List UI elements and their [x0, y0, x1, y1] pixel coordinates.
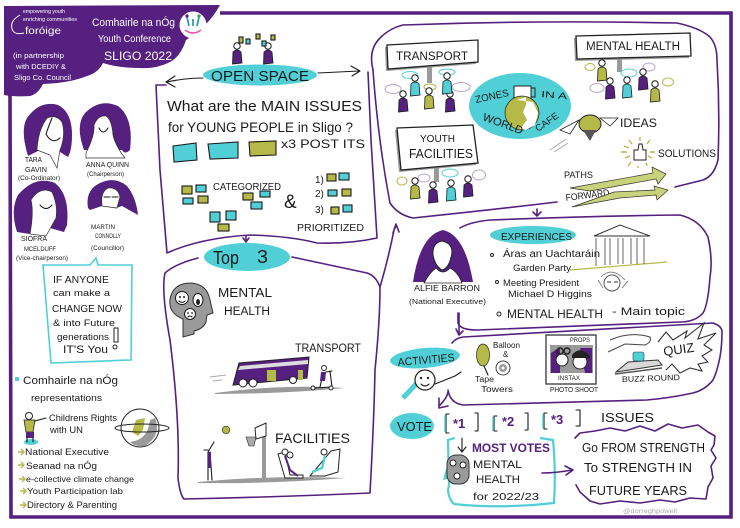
foróige logo: foróige: [25, 26, 62, 37]
post-it notes: [173, 141, 276, 162]
icon: pointing face: [403, 370, 461, 398]
vote pill: VOTE: [397, 419, 432, 434]
panel: alfie barron experiences: Michael D Higgins: [508, 289, 592, 300]
icon: buzzer and hand: [608, 335, 662, 374]
categorized post-its: [182, 185, 270, 231]
sign: youth facilities: FACILITIES: [409, 146, 473, 161]
panel: open space question: PRIORITIZED: [297, 222, 364, 234]
portrait: Martin Connolly: MARTIN: [91, 224, 115, 231]
panel: activities: Towers: [481, 384, 513, 394]
list: comhairle na nóg: representations: [31, 393, 102, 404]
header banner: [4, 5, 220, 96]
partnership note: with DCEDIY &: [15, 64, 66, 71]
panel: world cafe: PATHS: [564, 170, 593, 181]
foróige logo: [12, 9, 77, 37]
portrait: Tara Gavin: TARA: [25, 157, 42, 164]
panel: alfie barron experiences: Áras an Uachtaráin: [503, 247, 600, 260]
icon: aras building: [570, 225, 667, 270]
activities pill: ACTIVITIES: [397, 352, 455, 369]
panel: open space question: 2): [315, 189, 324, 200]
list: comhairle na nóg: e-collective climate change: [26, 474, 134, 484]
top 3 pill: 3: [257, 247, 268, 267]
arrows: paths forward: [570, 167, 668, 207]
list: comhairle na nóg: Comhairle na nÓg: [23, 374, 118, 387]
conference title: Comhairle na nÓg: [92, 16, 175, 29]
ranked issue brackets: ISSUES: [601, 410, 654, 425]
icon: bus and scooter: [210, 357, 345, 394]
foróige logo: empowering youth: [23, 9, 65, 15]
list: comhairle na nóg: Youth Participation lab: [27, 486, 123, 496]
experiences pill: [490, 226, 576, 244]
group: mental health zone people: [585, 60, 674, 102]
panel: alfie barron experiences: ALFIE BARRON: [414, 284, 480, 293]
portrait: Siofra McElduff: [14, 181, 68, 262]
portrait: Anna Quinn: [80, 103, 131, 178]
partnership note: (in partnership: [13, 51, 64, 60]
portrait: Anna Quinn: ANNA QUINN: [86, 162, 129, 169]
icon: people with post-its: [232, 34, 275, 64]
panel: top 3: FACILITIES: [275, 430, 350, 446]
sign: mental health: [574, 33, 691, 72]
portrait: Siofra McElduff: SIOFRA: [21, 236, 47, 243]
artist credit: @dorreghpowell: [623, 508, 678, 515]
world cafe globe badge: [469, 73, 571, 139]
panel: open space question: 1): [315, 175, 324, 186]
callout: if anyone can make a change: IF ANYONE: [53, 274, 109, 286]
panel: alfie barron experiences: - Main topic: [612, 306, 686, 318]
portrait: Siofra McElduff: MCELDUFF: [24, 246, 56, 253]
sign: mental health: MENTAL HEALTH: [586, 41, 680, 53]
panel: activities: &: [503, 350, 509, 359]
arrow: up to world cafe: [380, 224, 399, 287]
open space pill: [203, 64, 317, 86]
icon: flying lightbulb: [550, 115, 618, 152]
portrait: Martin Connolly: (Councillor): [91, 246, 124, 252]
conference title: [92, 16, 175, 63]
panel: alfie barron experiences: [409, 215, 711, 330]
panel: most votes: HEALTH: [476, 474, 520, 486]
ranked issue brackets: *3: [551, 412, 563, 427]
panel: most votes: MOST VOTES: [472, 443, 550, 455]
icon: thumbs up with rays: [621, 137, 655, 168]
icon: instax photo: [546, 335, 596, 384]
top 3 pill: [204, 243, 290, 271]
list: comhairle na nóg: National Executive: [25, 447, 109, 457]
ranked issue brackets: [445, 410, 654, 433]
callout: if anyone can make a change: & into Future: [53, 318, 115, 328]
portrait: Anna Quinn: (Chairperson): [87, 172, 124, 178]
ranked issue brackets: *1: [453, 416, 465, 431]
prioritized post-its: [327, 173, 352, 214]
panel: open space question: 3): [315, 205, 324, 216]
callout: if anyone can make a change: [43, 258, 132, 363]
panel: alfie barron experiences: MENTAL HEALTH: [507, 307, 603, 321]
icon: child pointing: [24, 412, 46, 445]
list: comhairle na nóg: Seanad na nÓg: [26, 461, 97, 471]
experiences pill: EXPERIENCES: [501, 231, 572, 243]
group: youth facilities zone people: [397, 169, 486, 203]
list: comhairle na nóg: Childrens Rights: [49, 413, 118, 423]
panel: most votes: for 2022/23: [473, 491, 539, 503]
panel: top 3: MENTAL: [218, 285, 272, 300]
portrait: Martin Connolly: CONNOLLY: [95, 233, 121, 240]
conference title: Youth Conference: [98, 34, 171, 45]
callout: if anyone can make a change: IT'S You: [63, 344, 108, 356]
panel: most votes: [443, 438, 555, 506]
sign: transport: [385, 40, 478, 83]
portrait: Tara Gavin: [18, 104, 72, 182]
panel: world cafe: SOLUTIONS: [658, 148, 716, 160]
panel: alfie barron experiences: Meeting President: [503, 278, 579, 289]
panel: activities: [389, 323, 722, 405]
group: transport zone people: [385, 69, 470, 112]
icon: basketball and hoop: [198, 423, 346, 483]
vote pill: [390, 413, 434, 439]
panel: top 3: TRANSPORT: [295, 341, 362, 355]
portrait: Martin Connolly: [88, 180, 138, 252]
quiz burst: [658, 323, 716, 373]
panel: top 3: HEALTH: [224, 306, 270, 318]
callout: if anyone can make a change: generations: [57, 332, 110, 342]
icon: instax photo: PROPS: [570, 338, 590, 344]
panel: open space question: [156, 72, 377, 253]
open space pill: OPEN SPACE: [211, 68, 309, 85]
panel: top 3: [164, 257, 380, 499]
ranked issue brackets: *2: [502, 414, 514, 429]
arrow: alfie to activities: [456, 313, 463, 335]
portrait: Tara Gavin: (Co-Ordinator): [18, 176, 60, 182]
icon: head small: [443, 455, 469, 484]
arrow: cafe to alfie: [533, 209, 541, 216]
icon: people in armchairs: [278, 449, 340, 478]
callout: go from strength to strength: [575, 424, 716, 504]
callout: go from strength to strength: FUTURE YEARS: [589, 483, 687, 498]
activities pill: [389, 345, 461, 371]
world cafe globe badge: IN A: [541, 89, 568, 101]
list: comhairle na nóg: [15, 374, 169, 510]
world cafe globe badge: ZONES: [474, 88, 510, 106]
panel: open space question: for YOUNG PEOPLE in Sligo ?: [168, 120, 353, 135]
sign: transport: TRANSPORT: [396, 49, 469, 63]
icon: globe with ring: [115, 409, 169, 447]
partnership note: Sligo Co. Council: [14, 75, 71, 82]
sign: youth facilities: [395, 125, 478, 182]
quiz burst: QUIZ: [662, 340, 695, 359]
panel: activities: BUZZ ROUND: [622, 373, 680, 384]
panel: world cafe: [372, 22, 719, 218]
icon: head with moods: [170, 283, 213, 337]
panel: open space question: &: [284, 192, 297, 213]
panel: activities: Balloon: [493, 341, 520, 350]
panel: open space question: x3 POST ITS: [281, 139, 365, 151]
sign: youth facilities: YOUTH: [420, 134, 455, 145]
panel: activities: Tape: [475, 375, 495, 384]
portrait: alfie: [413, 230, 473, 283]
arrows from open space: [166, 66, 360, 87]
arrow to top 3: [243, 236, 249, 242]
callout: go from strength to strength: To STRENGTH IN: [584, 460, 692, 475]
comhairle logo: [180, 12, 206, 38]
panel: world cafe: IDEAS: [620, 116, 657, 130]
panel: open space question: CATEGORIZED: [213, 181, 281, 193]
foróige logo: enriching communities: [23, 17, 77, 23]
portrait: Tara Gavin: GAVIN: [25, 167, 47, 174]
world cafe globe badge: WORLD: [481, 112, 525, 137]
panel: open space question: What are the MAIN ISSUES: [167, 99, 362, 115]
world cafe globe badge: CAFE: [533, 111, 561, 134]
icon: president sketch: [598, 272, 628, 291]
portrait: Siofra McElduff: (Vice-chairperson): [16, 256, 68, 262]
callout: if anyone can make a change: can make a: [53, 288, 110, 298]
panel: alfie barron experiences: (National Executive): [409, 297, 487, 306]
arrow: most votes to strength: [542, 466, 573, 475]
list: comhairle na nóg: Directory & Parenting: [27, 500, 117, 510]
icon: instax photo: INSTAX: [558, 376, 580, 382]
panel: world cafe: FORWARD: [565, 188, 610, 204]
panel: most votes: MENTAL: [473, 459, 522, 471]
panel: activities: PHOTO SHOOT: [550, 385, 598, 394]
top 3 pill: Top: [213, 248, 239, 268]
callout: if anyone can make a change: CHANGE NOW: [52, 303, 122, 315]
arrow: activities to vote: [439, 392, 448, 408]
icon: balloon and tape: [476, 344, 510, 375]
conference title: SLIGO 2022: [104, 49, 172, 63]
list: comhairle na nóg: with UN: [49, 425, 83, 435]
panel: alfie barron experiences: Garden Party: [513, 263, 571, 274]
callout: go from strength to strength: Go FROM STRENGTH: [582, 440, 705, 455]
partnership note: [13, 51, 71, 82]
